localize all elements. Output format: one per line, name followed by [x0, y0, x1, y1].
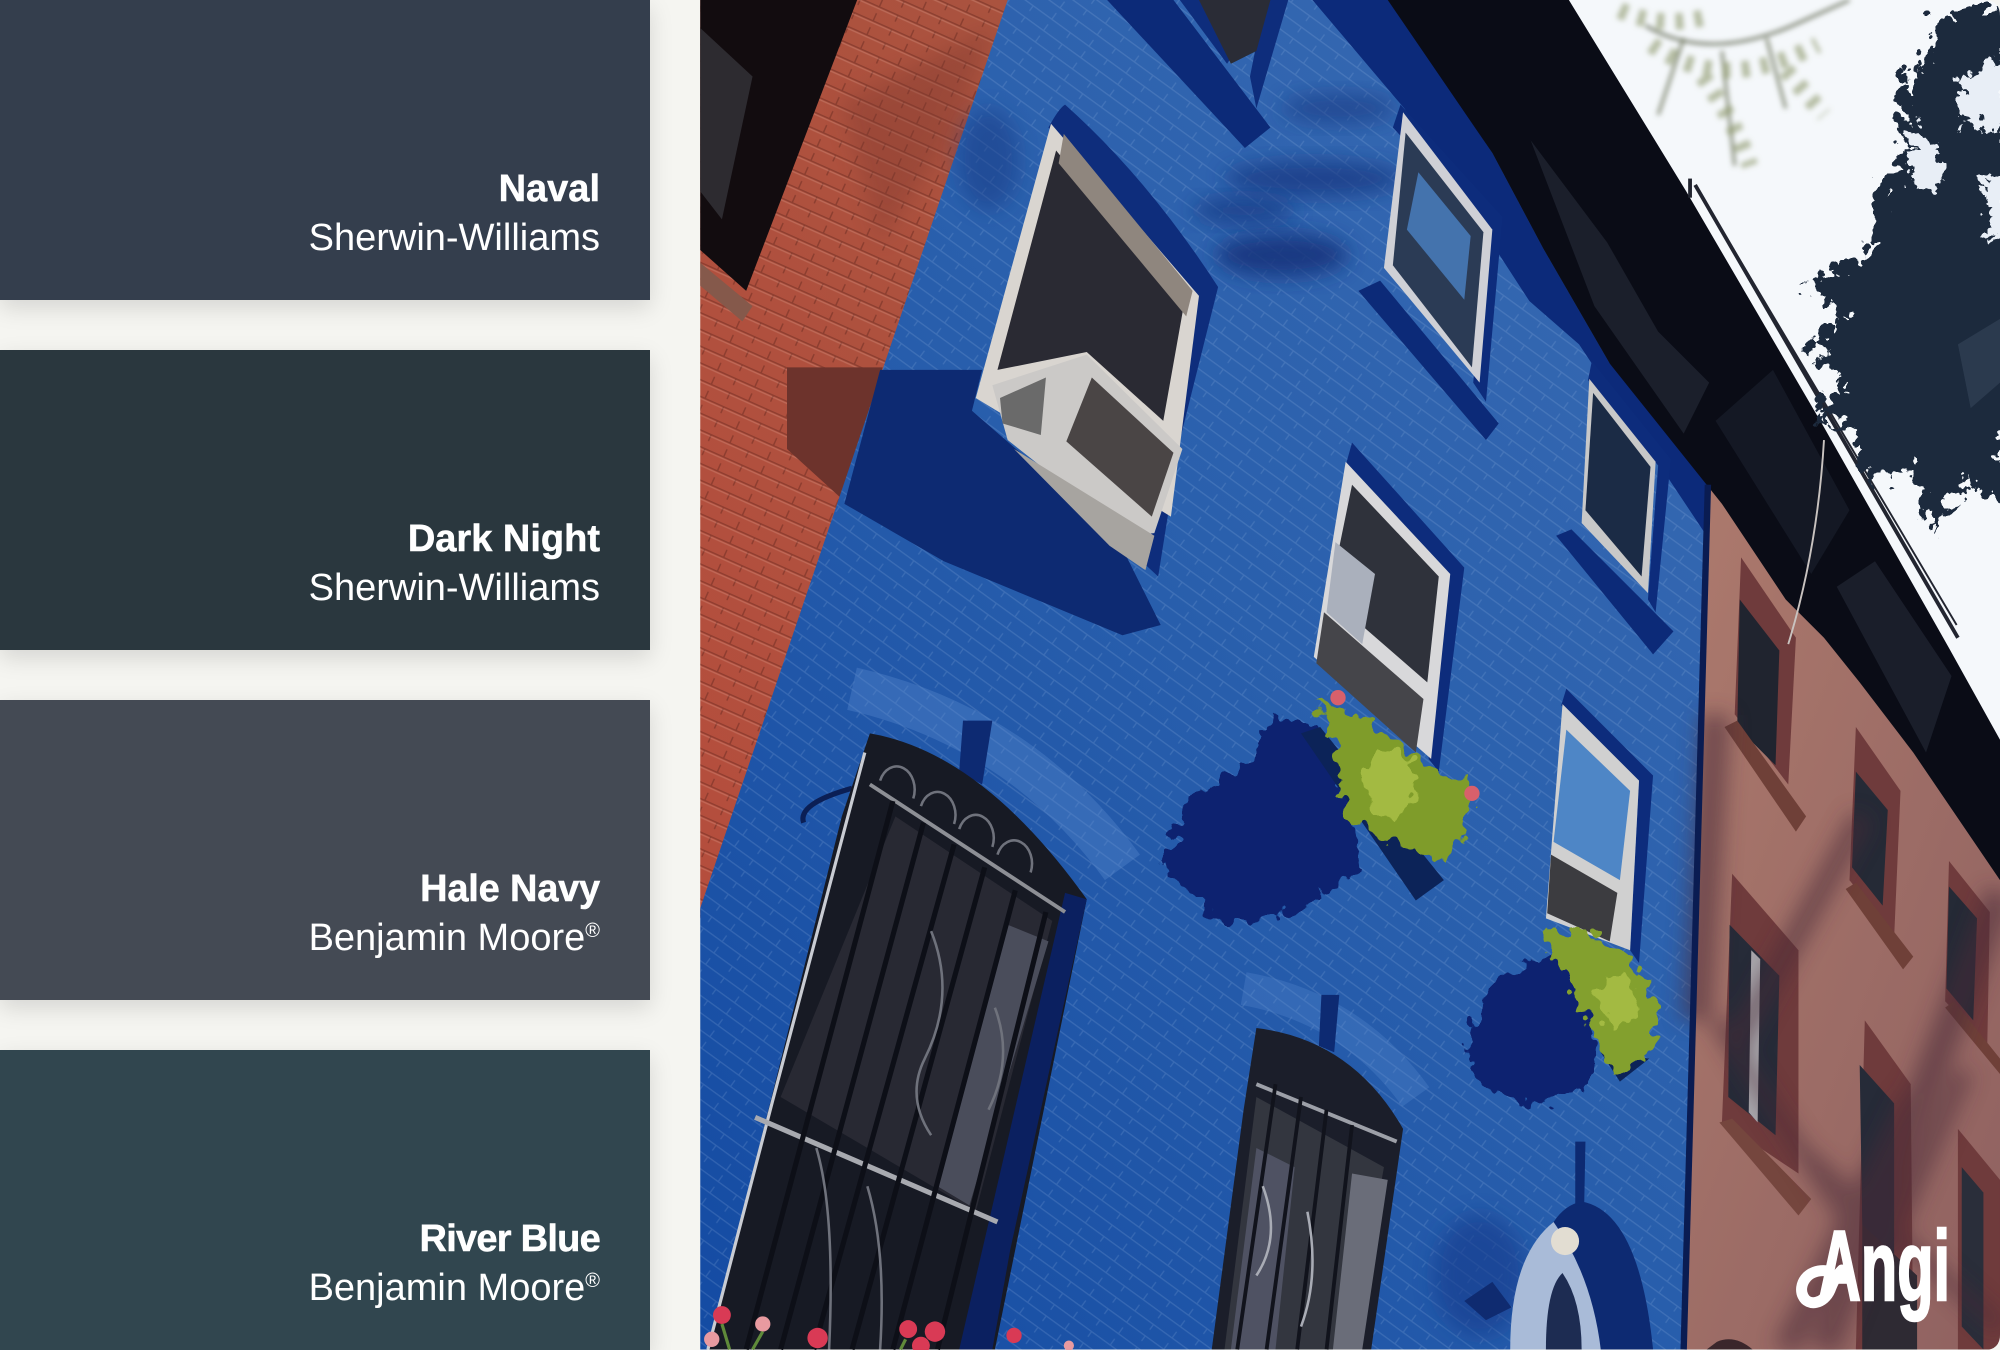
label: Naval, Sherwin-Williams: Sherwin-Williams	[309, 217, 600, 259]
roof railing	[1690, 179, 1958, 638]
label: River Blue, Benjamin Moore	[309, 1218, 600, 1309]
large barred window	[708, 721, 1087, 1349]
label: River Blue, Benjamin Moore: Benjamin Moore®	[309, 1267, 600, 1309]
flowers along the bottom	[704, 1306, 1074, 1350]
red brick building	[700, 0, 1020, 918]
label: Hale Navy, Benjamin Moore	[309, 868, 600, 959]
brown building	[1681, 478, 2000, 1349]
upper window and sill	[1358, 105, 1503, 440]
label: Dark Night, Sherwin-Williams: Sherwin-Williams	[309, 567, 600, 609]
Angi logo	[1796, 1226, 1947, 1322]
right middle window	[1546, 689, 1653, 963]
photo: blue painted brick townhouse	[700, 0, 2000, 1350]
dark tree leaves	[1796, 0, 2000, 526]
window with air conditioner	[844, 105, 1218, 635]
tree branch with small leaves	[1620, 0, 1849, 166]
panel: River Blue swatch	[0, 1050, 650, 1350]
label: Naval, Sherwin-Williams: Naval	[499, 168, 600, 210]
roof cornice	[1388, 0, 2000, 880]
label: Dark Night, Sherwin-Williams	[309, 518, 600, 609]
label: River Blue, Benjamin Moore: River Blue	[420, 1218, 600, 1260]
dappled tree shadows on brown building	[1696, 714, 2000, 1349]
label: Hale Navy, Benjamin Moore: Benjamin Moore®	[309, 917, 600, 959]
blue facade	[700, 0, 1716, 1349]
panel: Dark Night swatch	[0, 350, 650, 650]
flower box, lower	[1541, 931, 1663, 1082]
label: Dark Night, Sherwin-Williams: Dark Night	[408, 518, 600, 560]
right upper window	[1556, 361, 1673, 654]
panel: Naval swatch	[0, 0, 650, 300]
arched doorway with lamp	[1464, 1142, 1653, 1349]
label: Naval, Sherwin-Williams	[309, 168, 600, 259]
brown building windows	[1707, 557, 2000, 1349]
flower box, upper	[1301, 690, 1480, 901]
flower box shadow, upper	[1161, 714, 1358, 925]
flower box shadow, lower	[1467, 950, 1594, 1107]
top window and sill	[1107, 0, 1288, 148]
middle window	[1314, 443, 1464, 772]
drain pipe	[1684, 485, 1708, 1349]
lower barred window	[1212, 995, 1403, 1349]
panel: Hale Navy swatch	[0, 700, 650, 1000]
dark blue fascia under roof	[1312, 0, 1707, 531]
label: Hale Navy, Benjamin Moore: Hale Navy	[420, 868, 600, 910]
sky	[1569, 0, 2000, 739]
cable	[1788, 440, 1824, 644]
